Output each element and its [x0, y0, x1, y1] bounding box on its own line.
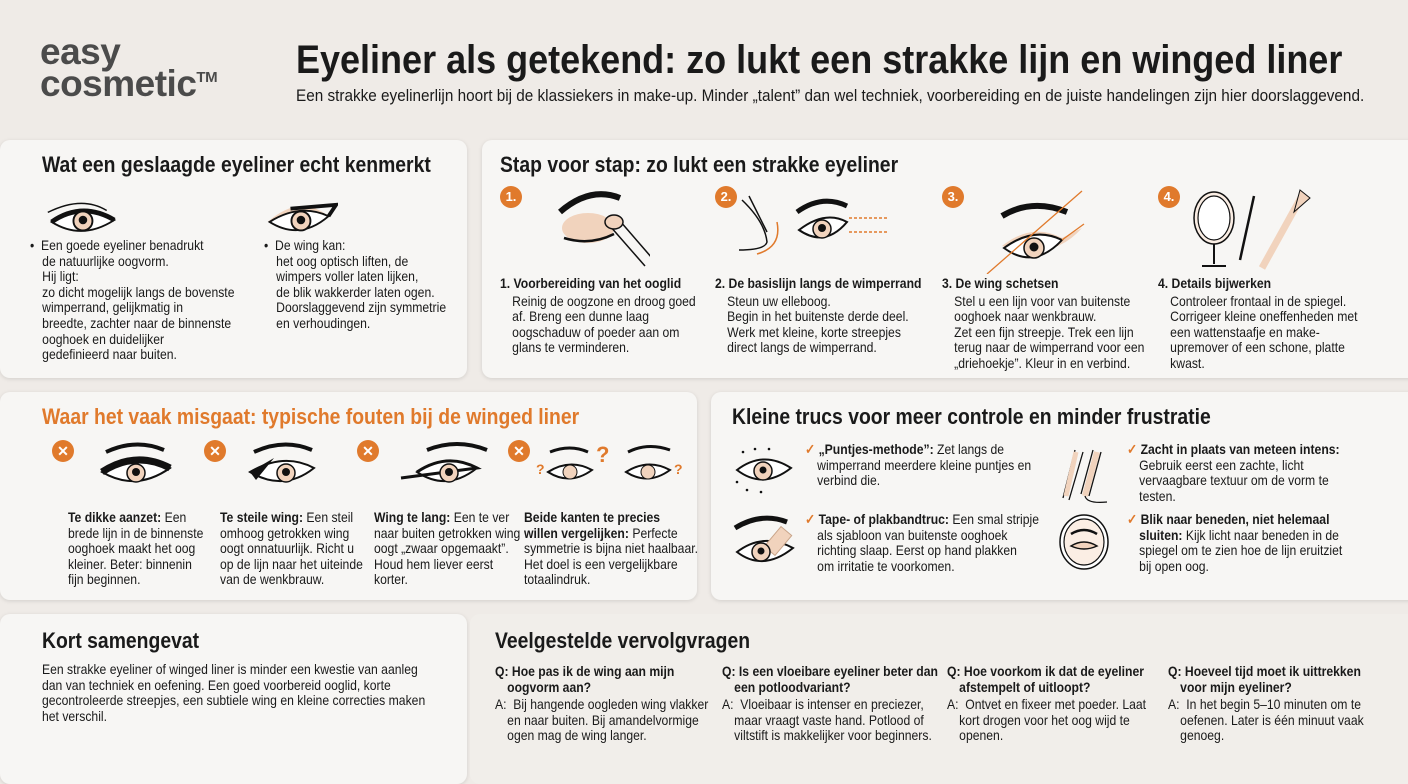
fout 4: ?	[536, 461, 545, 477]
text: list left: ooghoek en duidelijker	[42, 331, 164, 347]
fout 2: oogt onnatuurlijk. Richt u	[220, 540, 354, 556]
truc 2: testen.	[1139, 488, 1176, 504]
truc 2: vervaagbare textuur om de vorm te	[1139, 472, 1329, 488]
faq 4	[1168, 663, 1364, 743]
fout 2	[204, 440, 363, 587]
fout 2: ✕	[209, 443, 221, 459]
faq 1: Q: Hoe pas ik de wing aan mijn	[495, 663, 674, 679]
icon: winged eye	[268, 202, 338, 232]
truc 1: ✓ „Puntjes-methode”: Zet langs de	[805, 441, 1004, 457]
faq 3: kort drogen voor het oog wijd te	[959, 712, 1130, 728]
step 3: Stel u een lijn voor van buitenste	[954, 293, 1130, 309]
fout 1: Te dikke aanzet: Een	[68, 509, 186, 525]
fout 3: ✕	[362, 443, 374, 459]
logo: cosmeticTM	[40, 63, 217, 104]
step 1: af. Breng een dunne laag	[512, 308, 649, 324]
fout 2: op de lijn naar het uiteinde	[220, 556, 363, 572]
truc 2: Gebruik eerst een zachte, licht	[1139, 457, 1304, 473]
fout 4: ✕	[513, 443, 525, 459]
faq 4: voor mijn eyeliner?	[1180, 679, 1292, 695]
step 1: oogschaduw of poeder aan om	[512, 324, 679, 340]
panel: trucs	[711, 392, 1408, 600]
step 4: een wattenstaafje en make-	[1170, 324, 1320, 340]
step 2: Werk met kleine, korte streepjes	[727, 324, 901, 340]
truc 3: als sjabloon van buitenste ooghoek	[817, 527, 1007, 543]
truc 3	[734, 511, 1039, 574]
text: list left	[30, 237, 234, 362]
truc 2: ✓ Zacht in plaats van meteen intens:	[1127, 441, 1340, 457]
faq 3	[947, 663, 1146, 743]
heading: Stap voor stap: zo lukt een strakke eyeliner	[500, 152, 898, 177]
faq 2: Q: Is een vloeibare eyeliner beter dan	[722, 663, 938, 679]
fout 3	[357, 440, 520, 587]
title: Eyeliner als getekend: zo lukt een strakke lijn en winged liner	[296, 38, 1342, 82]
fout 1: kleiner. Beter: binnenin	[68, 556, 192, 572]
truc 4: sluiten: Kijk licht naar beneden in de	[1139, 527, 1339, 543]
step 1: glans te verminderen.	[512, 339, 629, 355]
text	[42, 661, 425, 724]
step 4: kwast.	[1170, 355, 1205, 371]
faq 2: viltstift is makkelijker voor beginners.	[734, 727, 932, 743]
fout 1: ooghoek maakt het oog	[68, 540, 195, 556]
text: het verschil.	[42, 708, 107, 724]
heading: Wat een geslaagde eyeliner echt kenmerkt	[42, 152, 431, 177]
fout 4: totaalindruk.	[524, 571, 590, 587]
truc 4: ✓ Blik naar beneden, niet helemaal	[1127, 511, 1329, 527]
step 1: 1.	[506, 189, 516, 204]
truc 3: richting slaap. Eerst op hand plakken	[817, 542, 1017, 558]
faq 1: ogen mag de wing langer.	[507, 727, 647, 743]
faq 3: openen.	[959, 727, 1003, 743]
text: list right	[264, 237, 446, 331]
text: list left: wimperrand, gelijkmatig in	[42, 299, 183, 315]
step 4: upremover of een schone, platte	[1170, 339, 1345, 355]
step 2: 2.	[721, 189, 731, 204]
text: list left: zo dicht mogelijk langs de bovenste	[42, 284, 234, 300]
step 1	[500, 186, 696, 355]
text: list right: en verhoudingen.	[276, 315, 370, 331]
faq 4: genoeg.	[1180, 727, 1224, 743]
fout 1	[52, 440, 203, 587]
faq 1: oogvorm aan?	[507, 679, 591, 695]
step 4: 4. Details bijwerken	[1158, 275, 1271, 291]
truc 2	[1062, 441, 1340, 504]
text: dan van techniek en oefening. Een goed voorbereid ooglid, korte	[42, 677, 391, 693]
subtitle: Een strakke eyelinerlijn hoort bij de klassiekers in make-up. Minder „talent” dan wel techniek, voorbereiding en de juiste handelingen zijn hier doorslaggevend.	[296, 86, 1364, 105]
faq 2: een potloodvariant?	[734, 679, 851, 695]
faq 3: afstempelt of uitloopt?	[959, 679, 1090, 695]
step 2: Begin in het buitenste derde deel.	[727, 308, 909, 324]
fout 3: korter.	[374, 571, 408, 587]
step 4: Controleer frontaal in de spiegel.	[1170, 293, 1346, 309]
panel: kenmerken	[0, 140, 467, 378]
fout 4: ?	[596, 442, 609, 467]
text: list right: de blik wakkerder laten ogen.	[276, 284, 435, 300]
faq 2: A: Vloeibaar is intenser en preciezer,	[722, 696, 924, 712]
icon: eye liner	[48, 202, 116, 232]
faq 3: A: Ontvet en fixeer met poeder. Laat	[947, 696, 1146, 712]
text: list right: • De wing kan:	[264, 237, 345, 253]
fout 2: Te steile wing: Een steil	[220, 509, 353, 525]
truc 3: ✓ Tape- of plakbandtruc: Een smal stripje	[805, 511, 1039, 527]
text: list right: het oog optisch liften, de	[276, 253, 408, 269]
step 1: Reinig de oogzone en droog goed	[512, 293, 696, 309]
step 3: 3.	[948, 189, 958, 204]
fout 4: ?	[674, 461, 683, 477]
truc 4: spiegel om te zien hoe de lijn eruitziet	[1139, 542, 1342, 558]
fout 4: symmetrie is bijna niet haalbaar.	[524, 540, 698, 556]
step 4: 4.	[1164, 189, 1174, 204]
logo: easy	[40, 31, 120, 72]
text: list right: wimpers voller laten lijken,	[276, 268, 418, 284]
truc 1	[736, 441, 1031, 494]
panel: fouten	[0, 392, 697, 600]
step 4	[1158, 186, 1358, 371]
fout 4: Het doel is een vergelijkbare	[524, 556, 678, 572]
step 3: terug naar de wimperrand voor een	[954, 339, 1144, 355]
fout 1: ✕	[57, 443, 69, 459]
step 2: Steun uw elleboog.	[727, 293, 831, 309]
heading: Kort samengevat	[42, 628, 199, 653]
step 3	[942, 186, 1144, 371]
truc 4	[1059, 511, 1342, 574]
panel: FAQ	[470, 614, 1408, 784]
text: gecontroleerde streepjes, een subtiele wing en kleine correcties maken	[42, 692, 425, 708]
text: list left: Hij ligt:	[42, 268, 79, 284]
faq 4: oefenen. Later is één minuut vaak	[1180, 712, 1364, 728]
step 1: 1. Voorbereiding van het ooglid	[500, 275, 681, 291]
fout 2: van de wenkbrauw.	[220, 571, 324, 587]
step 3: 3. De wing schetsen	[942, 275, 1058, 291]
fout 3: Houd hem liever eerst	[374, 556, 493, 572]
fout 4: Beide kanten te precies	[524, 509, 660, 525]
faq 2: maar vraagt vaste hand. Potlood of	[734, 712, 924, 728]
step 2: direct langs de wimperrand.	[727, 339, 877, 355]
text: list left: • Een goede eyeliner benadrukt	[30, 237, 204, 253]
fout 3: naar buiten getrokken wing	[374, 525, 520, 541]
panel: stap voor stap	[482, 140, 1408, 378]
panel: samenvatting	[0, 614, 467, 784]
fout 1: brede lijn in de binnenste	[68, 525, 203, 541]
step 3: Zet een fijn streepje. Trek een lijn	[954, 324, 1134, 340]
fout 2: omhoog getrokken wing	[220, 525, 349, 541]
fout 3: oogt „zwaar opgemaakt”.	[374, 540, 509, 556]
heading: Kleine trucs voor meer controle en minder frustratie	[732, 404, 1211, 429]
heading: Veelgestelde vervolgvragen	[495, 628, 750, 653]
truc 1: verbind die.	[817, 472, 880, 488]
truc 3: om irritatie te voorkomen.	[817, 558, 955, 574]
step 4: Corrigeer kleine oneffenheden met	[1170, 308, 1358, 324]
step 2: 2. De basislijn langs de wimperrand	[715, 275, 921, 291]
logo	[40, 31, 217, 104]
faq 4: Q: Hoeveel tijd moet ik uittrekken	[1168, 663, 1361, 679]
faq 3: Q: Hoe voorkom ik dat de eyeliner	[947, 663, 1144, 679]
text: list left: breedte, zachter naar de binnenste	[42, 315, 231, 331]
heading: Waar het vaak misgaat: typische fouten bij de winged liner	[42, 404, 579, 429]
fout 1: fijn beginnen.	[68, 571, 140, 587]
text: list right: Doorslaggevend zijn symmetrie	[276, 299, 446, 315]
faq 4: A: In het begin 5–10 minuten om te	[1168, 696, 1361, 712]
text: list left: gedefinieerd naar buiten.	[42, 346, 177, 362]
fout 4	[508, 440, 698, 587]
fout 3: Wing te lang: Een te ver	[374, 509, 509, 525]
faq 1: en naar buiten. Bij amandelvormige	[507, 712, 699, 728]
text: list left: de natuurlijke oogvorm.	[42, 253, 169, 269]
step 2	[715, 186, 921, 355]
text: Een strakke eyeliner of winged liner is minder een kwestie van aanleg	[42, 661, 418, 677]
step 3: „driehoekje”. Kleur in en verbind.	[954, 355, 1130, 371]
step 3: ooghoek naar wenkbrauw.	[954, 308, 1096, 324]
truc 1: wimperrand meerdere kleine puntjes en	[817, 457, 1031, 473]
truc 4: bij open oog.	[1139, 558, 1209, 574]
fout 4: willen vergelijken: Perfecte	[524, 525, 678, 541]
faq 1	[495, 663, 708, 743]
faq 1: A: Bij hangende oogleden wing vlakker	[495, 696, 708, 712]
faq 2	[722, 663, 938, 743]
